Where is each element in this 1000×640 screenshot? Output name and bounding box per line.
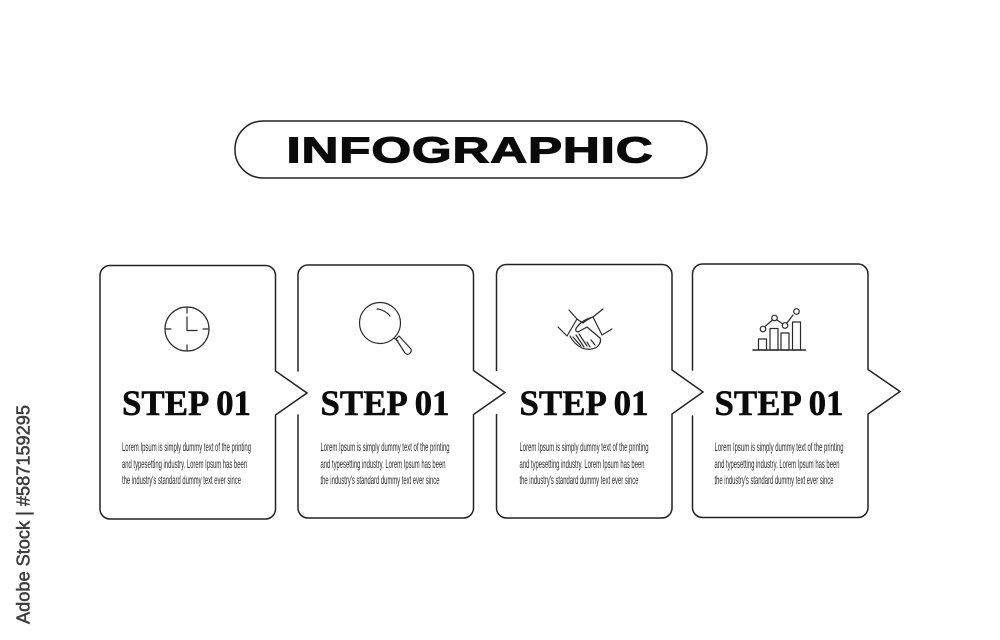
panel: step 1	[100, 266, 307, 519]
panel: step 4	[692, 264, 900, 518]
panel: step 1: Lorem Ipsum is simply dummy text of the printing	[122, 440, 251, 454]
step heading: STEP 01	[122, 383, 251, 423]
title pill	[235, 121, 707, 178]
step text: the industry's standard dummy text ever since	[122, 473, 241, 487]
panel: step 3: Lorem Ipsum is simply dummy text of the printing	[520, 440, 648, 454]
step text: and typesetting industry. Lorem Ipsum has been	[520, 457, 644, 471]
panel: step 2: Lorem Ipsum is simply dummy text of the printing	[320, 440, 450, 454]
step text	[320, 440, 450, 487]
step text	[714, 440, 844, 487]
title text: INFOGRAPHIC	[286, 130, 653, 171]
icon: bar chart	[753, 309, 806, 350]
step text: and typesetting industry. Lorem Ipsum has been	[714, 457, 840, 471]
step text: the industry's standard dummy text ever since	[714, 473, 834, 487]
icon: clock	[165, 307, 209, 351]
step text: the industry's standard dummy text ever since	[320, 473, 440, 487]
step text: and typesetting industry. Lorem Ipsum has been	[122, 457, 247, 471]
panel: step 4: Lorem Ipsum is simply dummy text of the printing	[714, 440, 844, 454]
step heading: STEP 01	[714, 383, 844, 423]
watermark: stock credit: Adobe Stock | #587159295	[12, 405, 34, 624]
panel: step 2	[298, 265, 505, 518]
icon: handshake	[558, 309, 612, 349]
step text	[520, 440, 648, 487]
icon: magnifying glass	[360, 302, 411, 354]
step heading: STEP 01	[320, 383, 450, 423]
panel: step 3	[496, 264, 703, 518]
step text: and typesetting industry. Lorem Ipsum has been	[320, 457, 446, 471]
step text	[122, 440, 251, 487]
step heading: STEP 01	[520, 383, 648, 423]
step text: the industry's standard dummy text ever since	[520, 473, 639, 487]
